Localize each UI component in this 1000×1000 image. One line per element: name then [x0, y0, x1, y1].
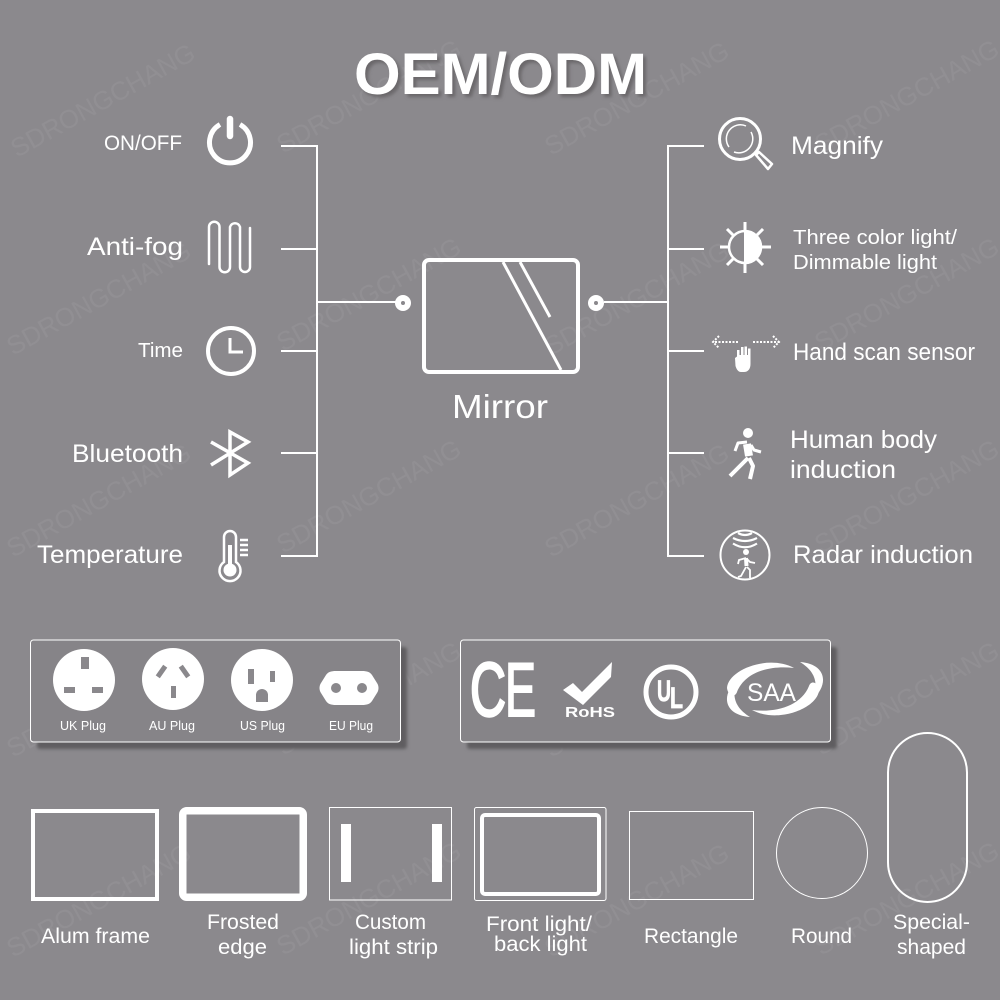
label: Alum frame: Alum frame [41, 925, 150, 948]
shape: frosted edge [183, 811, 303, 897]
label: Human body induction [790, 426, 938, 484]
logo: SAA: SAA [747, 679, 796, 707]
label: Frosted edge: edge [218, 936, 267, 959]
label: AU Plug: AU Plug [149, 719, 195, 733]
shape: alum frame [33, 811, 157, 899]
shape: custom light strip [330, 808, 452, 900]
label: ON/OFF: ON/OFF [104, 132, 182, 155]
label: Round: Round [791, 925, 852, 948]
watermark pattern: SDRONGCHANG [809, 231, 1000, 357]
watermark pattern: SDRONGCHANG [809, 835, 1000, 961]
label: Front light / back light [486, 913, 592, 956]
watermark pattern: SDRONGCHANG [809, 33, 1000, 159]
icon: mirror [424, 260, 578, 372]
label: Special-shaped [893, 911, 970, 959]
icon: clock [208, 328, 254, 374]
icon: EU plug [320, 671, 378, 705]
watermark pattern: SDRONGCHANG [539, 837, 734, 963]
label: Hand scan sensor: Hand scan sensor [793, 339, 975, 366]
panel: plug types [30, 640, 407, 749]
panel: certifications [460, 640, 837, 749]
shape: round [776, 808, 868, 898]
label: Bluetooth: Bluetooth [72, 440, 183, 468]
label: Front light / back light: back light [494, 933, 587, 956]
watermark pattern: SDRONGCHANG [271, 231, 466, 357]
logo: UL: L [670, 682, 683, 715]
logo: UL [646, 667, 696, 717]
label: Human body induction: induction [790, 456, 896, 484]
icon: thermometer [219, 531, 248, 581]
label: Time: Time [138, 340, 183, 362]
watermark pattern: SDRONGCHANG [539, 35, 734, 161]
label: Front light / back light: Front light/ [486, 913, 592, 936]
icon: hand scan [713, 336, 779, 372]
icon: magnifier [720, 118, 772, 169]
label: Custom light strip: Custom [355, 911, 426, 934]
label: Temperature: Temperature [37, 541, 183, 569]
label: Frosted edge: Frosted [207, 911, 279, 934]
watermark pattern: SDRONGCHANG [809, 433, 1000, 559]
watermark pattern: SDRONGCHANG [1, 437, 196, 563]
icon: US plug [231, 649, 293, 711]
icon: bluetooth [211, 432, 248, 475]
logo: RoHS [563, 662, 615, 721]
watermark pattern: SDRONGCHANG [539, 235, 734, 361]
watermark pattern: SDRONGCHANG [5, 37, 200, 163]
watermark pattern: SDRONGCHANG [539, 437, 734, 563]
icon: half sun [720, 222, 771, 273]
label: Human body induction: Human body [790, 426, 938, 454]
watermark pattern: SDRONGCHANG [1, 235, 196, 361]
label: US Plug: US Plug [240, 719, 285, 733]
logo: SAA [727, 662, 823, 717]
label: Mirror: Mirror [452, 388, 548, 425]
logo: RoHS: RoHS [565, 704, 615, 721]
label: Frosted edge [207, 911, 279, 959]
title: OEM/ODM [354, 42, 647, 107]
logo: UL: U [657, 675, 671, 708]
watermark pattern: SDRONGCHANG [1, 837, 196, 963]
icon: walking person [730, 428, 761, 479]
label: Anti-fog: Anti-fog [87, 233, 183, 261]
watermark pattern: SDRONGCHANG [1, 637, 196, 763]
shape: rectangle [630, 812, 754, 900]
right connector node [588, 295, 604, 311]
icon: UK plug [53, 649, 115, 711]
label: Special-shaped: Special- [893, 911, 970, 934]
watermark pattern: SDRONGCHANG [271, 33, 466, 159]
right connector lines [604, 146, 704, 556]
label: Radar induction: Radar induction [793, 541, 973, 569]
icon: radar person [720, 530, 770, 580]
title: OEM/ODM [357, 45, 650, 110]
watermark pattern: SDRONGCHANG [539, 637, 734, 763]
label: Custom light strip: light strip [349, 936, 438, 959]
label: EU Plug: EU Plug [329, 719, 373, 733]
watermark pattern: SDRONGCHANG [271, 433, 466, 559]
label: Three color / Dimmable light [793, 226, 957, 274]
left connector node [395, 295, 411, 311]
left connector lines [281, 146, 396, 556]
label: UK Plug: UK Plug [60, 719, 106, 733]
logo: CE: C [470, 648, 506, 733]
label: Three color / Dimmable light: Three color light/ [793, 226, 957, 249]
icon: anti-fog heater [209, 222, 250, 272]
shape: front light / back light [474, 808, 606, 900]
watermark pattern: SDRONGCHANG [809, 635, 1000, 761]
watermark pattern: SDRONGCHANG [271, 835, 466, 961]
watermark pattern: SDRONGCHANG [271, 635, 466, 761]
label: Custom light strip [349, 911, 438, 959]
label: Rectangle: Rectangle [644, 925, 738, 948]
label: Three color / Dimmable light: Dimmable light [793, 251, 937, 274]
icon: AU plug [142, 648, 204, 710]
logo: CE: E [505, 648, 536, 733]
label: Magnify: Magnify [791, 132, 884, 160]
icon: power [210, 119, 250, 163]
shape: special-shaped [888, 733, 967, 902]
label: Special-shaped: shaped [897, 936, 966, 959]
